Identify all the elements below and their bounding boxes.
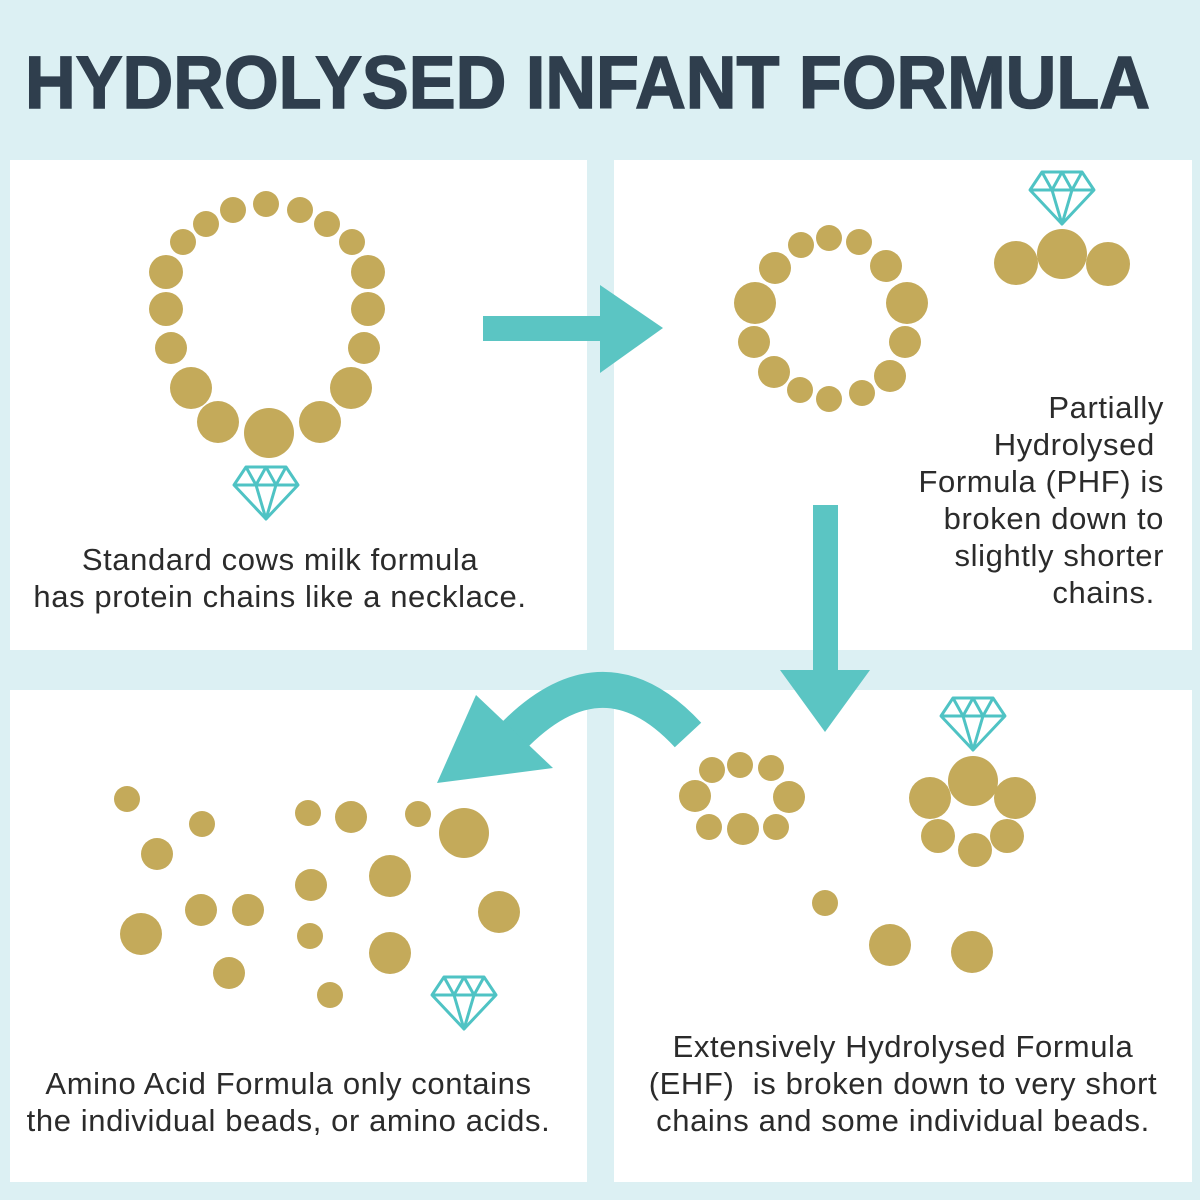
text: amino acid: Amino Acid Formula only contains: [45, 1066, 532, 1101]
icon: diamond necklace: [234, 467, 298, 519]
icon: diamond EHF: [941, 698, 1005, 750]
panel: standard formula: [10, 160, 587, 650]
panel: amino acid formula: [10, 690, 587, 1182]
text: amino acid: the individual beads, or amino acids.: [27, 1103, 550, 1138]
icon: diamond PHF: [1030, 172, 1094, 224]
text: EHF: chains and some individual beads.: [656, 1103, 1150, 1138]
panel: PHF: [614, 160, 1192, 650]
text: standard formula: has protein chains like a necklace.: [33, 579, 527, 614]
text: EHF: (EHF) is broken down to very short: [649, 1066, 1157, 1101]
PHF ring beads: [734, 225, 1130, 412]
text: PHF: Partially: [1048, 390, 1164, 425]
amino acid beads: [114, 786, 520, 1008]
icon: diamond amino: [432, 977, 496, 1029]
text: PHF: Hydrolysed: [994, 427, 1155, 462]
text: standard formula: Standard cows milk formula: [82, 542, 478, 577]
text: PHF: broken down to: [944, 501, 1164, 536]
text: EHF: [649, 1029, 1157, 1138]
necklace beads: [149, 191, 385, 458]
text: PHF: chains.: [1052, 575, 1155, 610]
arrow down: [780, 505, 870, 732]
title: HYDROLYSED INFANT FORMULA: [25, 41, 1150, 124]
panel: EHF: [614, 690, 1192, 1182]
text: PHF: slightly shorter: [955, 538, 1164, 573]
text: amino acid: [27, 1066, 550, 1138]
arrow right: [483, 285, 663, 373]
EHF beads: [679, 752, 1036, 973]
text: PHF: [918, 390, 1164, 610]
text: EHF: Extensively Hydrolysed Formula: [673, 1029, 1133, 1064]
text: PHF: Formula (PHF) is: [918, 464, 1164, 499]
text: standard formula: [33, 542, 527, 614]
curved arrow: [437, 690, 688, 783]
